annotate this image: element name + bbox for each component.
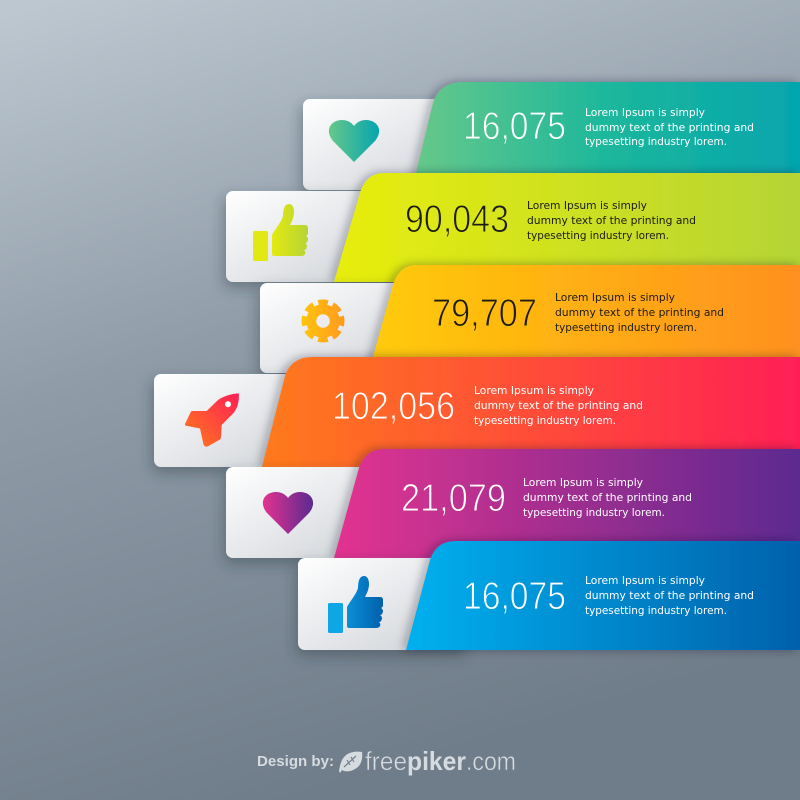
site name: piker [407, 746, 466, 776]
description 2: dummy text of the printing and [527, 214, 696, 227]
icon: leaf logo [339, 752, 362, 773]
description 1: dummy text of the printing and [585, 121, 754, 134]
panel: row 4 rocket 102,056 [154, 357, 800, 467]
number 102,056: 102,056 [332, 385, 455, 428]
site name: .com [466, 746, 516, 776]
description 4: typesetting industry lorem. [474, 414, 616, 427]
icon card 1 [303, 99, 473, 190]
description 1 [585, 106, 754, 148]
ribbon 1 [412, 82, 800, 190]
ribbon 3 [368, 265, 800, 375]
panel: row 5 heart 21,079 [226, 449, 800, 558]
icon: orange gear [304, 302, 342, 340]
icon card 6 [298, 558, 468, 650]
description 5: Lorem Ipsum is simply [523, 476, 643, 489]
credit label: Design by: [257, 754, 334, 770]
icon: magenta heart [263, 492, 313, 534]
number 79,707: 79,707 [432, 292, 537, 335]
icon card 2 [226, 191, 396, 282]
icon: red rocket [185, 393, 239, 447]
description 1: Lorem Ipsum is simply [585, 106, 705, 119]
number 16,075: 16,075 [463, 575, 566, 618]
description 5 [523, 476, 692, 519]
description 5: dummy text of the printing and [523, 491, 692, 504]
number 16,075: 16,075 [463, 105, 566, 148]
description 5: typesetting industry lorem. [523, 506, 665, 519]
watermark credit [257, 746, 516, 776]
panel: row 2 thumbs up 90,043 [226, 173, 800, 282]
site name [365, 746, 516, 776]
description 2: typesetting industry lorem. [527, 229, 669, 242]
panel: row 6 thumbs up 16,075 [298, 541, 800, 650]
description 3: dummy text of the printing and [555, 306, 724, 319]
icon card 3 [260, 283, 430, 373]
panel: row 3 gear 79,707 [260, 265, 800, 375]
site name: free [365, 746, 407, 776]
description 3: Lorem Ipsum is simply [555, 291, 675, 304]
description 1: typesetting industry lorem. [585, 135, 727, 148]
description 3 [555, 291, 724, 334]
description 4: dummy text of the printing and [474, 399, 643, 412]
description 3: typesetting industry lorem. [555, 321, 697, 334]
description 6 [585, 574, 754, 617]
panel: row 1 heart 16,075 [303, 82, 800, 190]
icon: teal heart [329, 120, 379, 162]
ribbon 6 [406, 541, 800, 650]
number 90,043: 90,043 [405, 198, 509, 241]
icon card 5 [226, 467, 396, 558]
description 4 [474, 384, 643, 427]
icon: blue thumbs up [328, 576, 383, 633]
description 6: typesetting industry lorem. [585, 604, 727, 617]
description 4: Lorem Ipsum is simply [474, 384, 594, 397]
ribbon 5 [334, 449, 800, 558]
description 6: dummy text of the printing and [585, 589, 754, 602]
ribbon 2 [334, 173, 800, 282]
description 2 [527, 199, 696, 242]
ribbon 4 [262, 357, 800, 467]
description 6: Lorem Ipsum is simply [585, 574, 705, 587]
icon card 4 [154, 374, 324, 467]
icon: lime thumbs up [253, 204, 308, 261]
number 21,079: 21,079 [401, 477, 506, 520]
description 2: Lorem Ipsum is simply [527, 199, 647, 212]
